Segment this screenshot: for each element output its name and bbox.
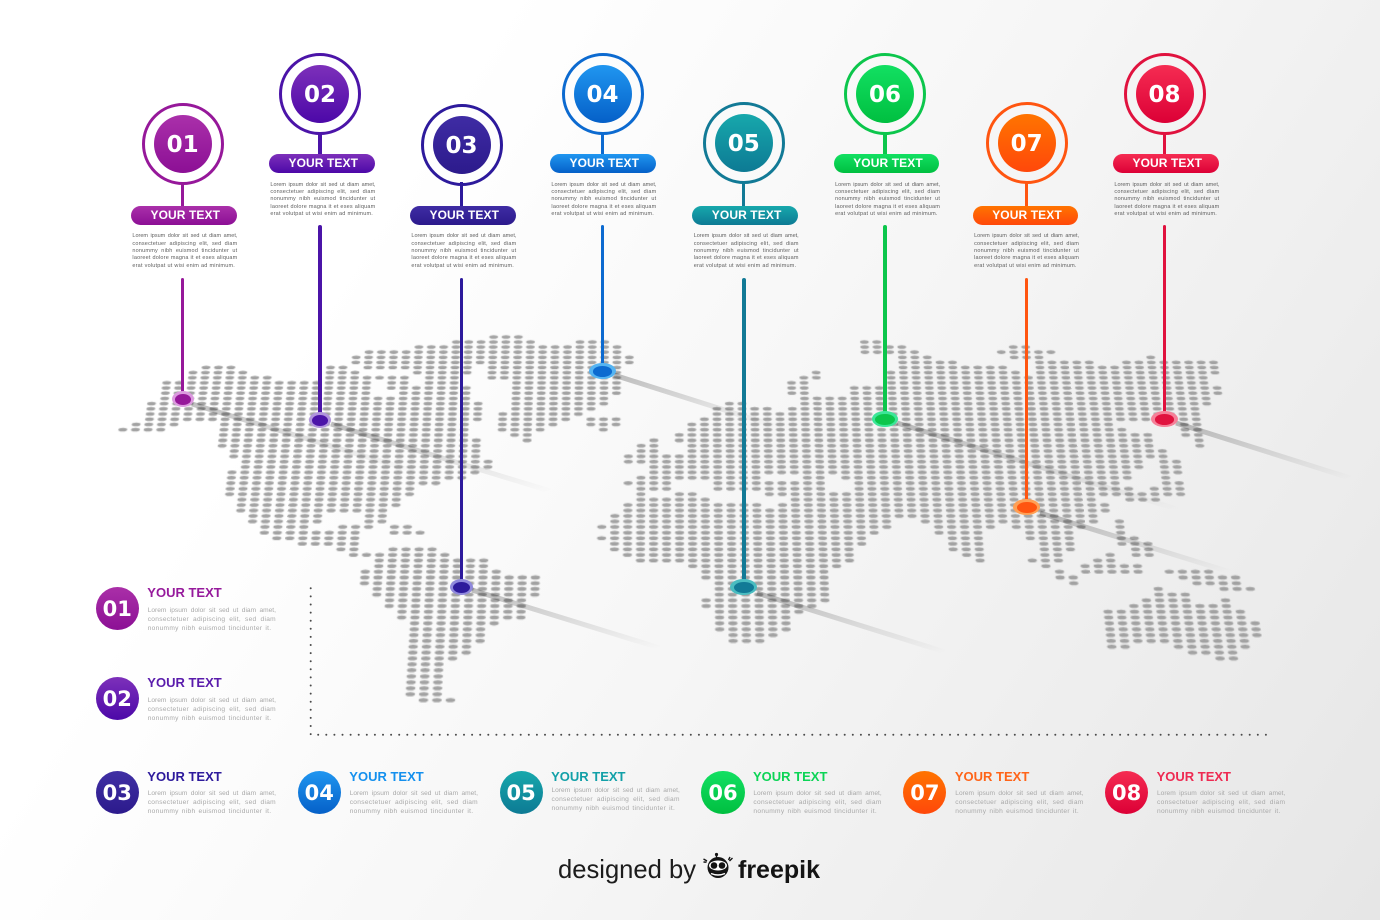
legend item 06: nonummy nibh euismod tincidunter it.: [753, 808, 877, 815]
legend item 02: Lorem ipsum dolor sit sed ut diam amet,: [148, 697, 276, 704]
description 02: erat volutpat ut wisi enim ad minimum.: [270, 211, 373, 217]
description 06: [835, 182, 940, 217]
number badge 02: 02: [304, 82, 336, 108]
legend item 03: 03: [103, 781, 132, 805]
panel: pin 01: [131, 103, 238, 407]
label pill 05: YOUR TEXT: [712, 208, 781, 222]
description 05: Lorem ipsum dolor sit sed ut diam amet,: [694, 233, 799, 239]
dotted legend frame: [310, 587, 1267, 736]
description 03: Lorem ipsum dolor sit sed ut diam amet,: [411, 233, 516, 239]
panel: pin 03: [410, 104, 516, 595]
description 02: consectetuer adipiscing elit, sed diam: [270, 189, 375, 195]
legend item 05: nonummy nibh euismod tincidunter it.: [552, 805, 675, 812]
description 02: laoreet dolore magna it et eses aliquam: [270, 204, 375, 210]
description 08: Lorem ipsum dolor sit sed ut diam amet,: [1114, 182, 1219, 188]
description 03: nonummy nibh euismod tincidunter ut: [411, 248, 516, 254]
icon: freepik mascot: [703, 852, 733, 878]
legend item 04: nonummy nibh euismod tincidunter it.: [350, 808, 473, 815]
label pill 04: YOUR TEXT: [570, 156, 639, 170]
description 08: [1114, 182, 1220, 217]
legend item 08: consectetuer adipiscing elit, sed diam: [1157, 799, 1285, 806]
legend item 01: nonummy nibh euismod tincidunter it.: [148, 625, 271, 632]
legend item 05: Lorem ipsum dolor sit sed ut diam amet,: [552, 787, 680, 794]
legend item 04: Lorem ipsum dolor sit sed ut diam amet,: [350, 790, 478, 797]
number badge 07: [998, 114, 1056, 172]
legend item 03: Lorem ipsum dolor sit sed ut diam amet,: [148, 790, 276, 797]
label pill 07: YOUR TEXT: [992, 208, 1062, 222]
number badge 02: [291, 65, 349, 123]
description 07: nonummy nibh euismod tincidunter ut: [974, 248, 1079, 254]
description 01: erat volutpat ut wisi enim ad minimum.: [132, 263, 235, 269]
description 04: consectetuer adipiscing elit, sed diam: [551, 189, 656, 195]
description 03: consectetuer adipiscing elit, sed diam: [411, 241, 516, 247]
legend item 04: consectetuer adipiscing elit, sed diam: [350, 799, 478, 806]
legend item 03: [96, 769, 276, 815]
legend item 01: 01: [103, 597, 132, 621]
label pill 07: [973, 206, 1078, 225]
label pill 03: [410, 206, 516, 225]
description 05: laoreet dolore magna it et eses aliquam: [694, 255, 799, 261]
description 01: laoreet dolore magna it et eses aliquam: [132, 255, 237, 261]
description 04: erat volutpat ut wisi enim ad minimum.: [551, 211, 654, 217]
description 01: Lorem ipsum dolor sit sed ut diam amet,: [132, 233, 237, 239]
label pill 02: [269, 154, 375, 173]
legend item 03: nonummy nibh euismod tincidunter it.: [148, 808, 271, 815]
description 07: consectetuer adipiscing elit, sed diam: [974, 241, 1079, 247]
number badge 08: 08: [1148, 82, 1180, 108]
description 06: consectetuer adipiscing elit, sed diam: [835, 189, 940, 195]
number badge 04: 04: [586, 82, 618, 108]
panel: pin 05: [692, 102, 799, 595]
description 02: Lorem ipsum dolor sit sed ut diam amet,: [270, 182, 375, 188]
number badge 06: 06: [869, 82, 901, 108]
panel: pin 04: [550, 53, 656, 379]
description 03: erat volutpat ut wisi enim ad minimum.: [411, 263, 514, 269]
legend item 08: YOUR TEXT: [1157, 769, 1231, 784]
legend item 06: 06: [708, 781, 738, 805]
legend item 07: Lorem ipsum dolor sit sed ut diam amet,: [955, 790, 1084, 797]
legend item 07: nonummy nibh euismod tincidunter it.: [955, 808, 1079, 815]
legend item 01: YOUR TEXT: [147, 585, 222, 600]
legend item 06: consectetuer adipiscing elit, sed diam: [753, 799, 882, 806]
description 08: nonummy nibh euismod tincidunter ut: [1114, 196, 1219, 202]
number badge 07: 07: [1011, 131, 1043, 157]
legend item 02: 02: [103, 687, 132, 711]
number badge 05: 05: [728, 131, 760, 157]
legend item 04: YOUR TEXT: [349, 769, 424, 784]
number badge 08: [1136, 65, 1194, 123]
description 01: nonummy nibh euismod tincidunter ut: [132, 248, 237, 254]
legend item 07: [903, 769, 1084, 815]
legend item 07: YOUR TEXT: [955, 769, 1029, 784]
description 05: nonummy nibh euismod tincidunter ut: [694, 248, 799, 254]
legend item 08: Lorem ipsum dolor sit sed ut diam amet,: [1157, 790, 1285, 797]
description 08: erat volutpat ut wisi enim ad minimum.: [1114, 211, 1217, 217]
legend item 05: YOUR TEXT: [551, 769, 626, 784]
panel: pin 08: [1113, 53, 1220, 427]
description 02: nonummy nibh euismod tincidunter ut: [270, 196, 375, 202]
legend item 07: consectetuer adipiscing elit, sed diam: [955, 799, 1084, 806]
number badge 01: [154, 115, 212, 173]
number badge 05: [715, 114, 773, 172]
legend item 01: [96, 585, 276, 632]
label pill 01: [131, 206, 237, 225]
legend item 08: nonummy nibh euismod tincidunter it.: [1157, 808, 1281, 815]
legend item 07: 07: [910, 781, 940, 805]
label pill 06: YOUR TEXT: [853, 156, 923, 170]
legend item 04: [298, 769, 478, 815]
label pill 05: [692, 206, 798, 225]
legend item 02: [96, 675, 276, 722]
legend item 06: [701, 769, 882, 815]
number badge 04: [574, 65, 632, 123]
description 06: Lorem ipsum dolor sit sed ut diam amet,: [835, 182, 940, 188]
legend item 05: 05: [506, 781, 536, 805]
number badge 03: [432, 116, 490, 174]
label pill 06: [834, 154, 939, 173]
legend item 02: YOUR TEXT: [147, 675, 222, 690]
description 03: [411, 233, 516, 269]
number badge 01: 01: [167, 132, 199, 158]
description 06: erat volutpat ut wisi enim ad minimum.: [835, 211, 938, 217]
legend item 03: consectetuer adipiscing elit, sed diam: [148, 799, 276, 806]
label pill 08: [1113, 154, 1219, 173]
description 07: erat volutpat ut wisi enim ad minimum.: [974, 263, 1077, 269]
freepik credit: [558, 852, 820, 884]
panel: pin 07: [973, 102, 1079, 515]
number badge 03: 03: [445, 133, 478, 159]
legend item 08: [1105, 769, 1285, 815]
label pill 02: YOUR TEXT: [288, 156, 358, 170]
description 05: erat volutpat ut wisi enim ad minimum.: [694, 263, 796, 269]
freepik credit: freepik: [738, 856, 820, 884]
legend item 02: nonummy nibh euismod tincidunter it.: [148, 715, 271, 722]
description 03: laoreet dolore magna it et eses aliquam: [411, 255, 516, 261]
legend item 04: 04: [305, 781, 334, 805]
legend item 05: consectetuer adipiscing elit, sed diam: [552, 796, 680, 803]
legend item 05: [500, 769, 680, 814]
label pill 08: YOUR TEXT: [1132, 156, 1202, 170]
label pill 03: YOUR TEXT: [430, 208, 499, 222]
description 05: [694, 233, 799, 269]
description 06: laoreet dolore magna it et eses aliquam: [835, 204, 940, 210]
description 02: [270, 182, 376, 217]
description 07: laoreet dolore magna it et eses aliquam: [974, 255, 1079, 261]
description 01: consectetuer adipiscing elit, sed diam: [132, 241, 237, 247]
description 04: nonummy nibh euismod tincidunter ut: [551, 196, 656, 202]
legend item 06: YOUR TEXT: [753, 769, 827, 784]
panel: pin 02: [269, 53, 376, 428]
description 06: nonummy nibh euismod tincidunter ut: [835, 196, 940, 202]
legend item 01: consectetuer adipiscing elit, sed diam: [148, 616, 276, 623]
label pill 04: [550, 154, 656, 173]
description 08: consectetuer adipiscing elit, sed diam: [1114, 189, 1219, 195]
description 08: laoreet dolore magna it et eses aliquam: [1114, 204, 1219, 210]
legend item 01: Lorem ipsum dolor sit sed ut diam amet,: [148, 607, 276, 614]
description 04: [551, 182, 656, 217]
label pill 01: YOUR TEXT: [150, 208, 220, 222]
description 04: Lorem ipsum dolor sit sed ut diam amet,: [551, 182, 656, 188]
panel: pin 06: [834, 53, 940, 427]
legend item 03: YOUR TEXT: [147, 769, 222, 784]
legend item 02: consectetuer adipiscing elit, sed diam: [148, 706, 276, 713]
freepik credit: designed by: [558, 856, 696, 884]
description 07: [974, 233, 1079, 269]
legend item 08: 08: [1112, 781, 1141, 805]
description 01: [132, 233, 238, 269]
description 04: laoreet dolore magna it et eses aliquam: [551, 204, 656, 210]
legend item 06: Lorem ipsum dolor sit sed ut diam amet,: [753, 790, 882, 797]
dotted world map: [118, 334, 1262, 703]
description 07: Lorem ipsum dolor sit sed ut diam amet,: [974, 233, 1079, 239]
description 05: consectetuer adipiscing elit, sed diam: [694, 241, 799, 247]
number badge 06: [856, 65, 914, 123]
